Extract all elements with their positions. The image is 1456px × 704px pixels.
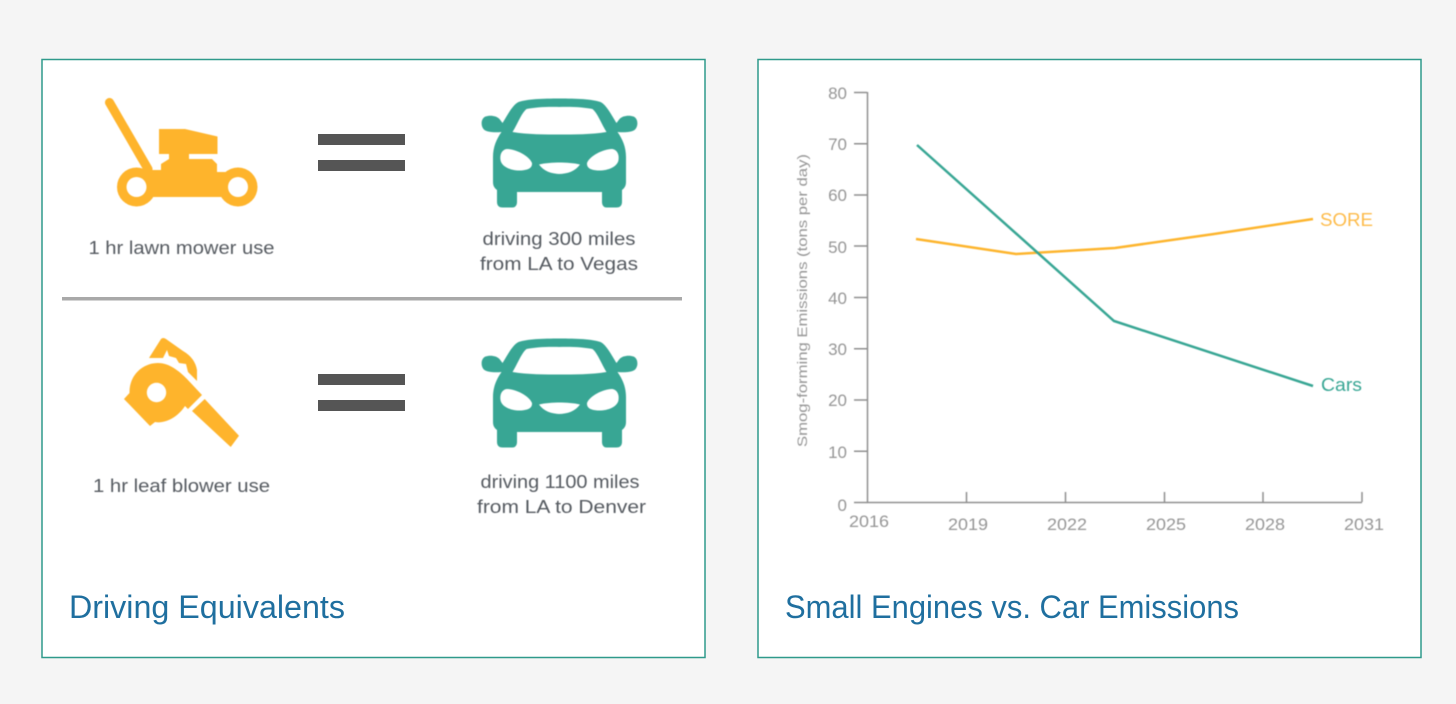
x-axis labels	[849, 512, 1384, 534]
heading: small engines vs car emissions: Small Engines vs. Car Emissions	[785, 589, 1239, 625]
x-axis labels: 2031	[1344, 515, 1384, 534]
icon: equals sign, row two	[318, 374, 405, 411]
line: SORE	[916, 219, 1313, 254]
y-axis labels	[828, 84, 847, 515]
x-axis labels: 2025	[1146, 515, 1186, 534]
icon: car, row one	[482, 98, 637, 208]
y-axis labels: 10	[828, 443, 847, 462]
caption: lawn mower: 1 hr lawn mower use	[88, 238, 274, 258]
y-axis labels: 20	[828, 391, 847, 410]
panel: driving equivalents	[42, 60, 705, 658]
label: SORE: SORE	[1320, 210, 1373, 230]
y-axis labels: 40	[828, 289, 847, 308]
caption: driving to Vegas	[480, 229, 638, 274]
icon: lawn mower	[110, 102, 258, 206]
panel: emissions chart	[758, 60, 1421, 658]
axes	[854, 92, 1362, 502]
caption: driving to Denver	[477, 472, 646, 517]
y-axis labels: 70	[828, 135, 847, 154]
icon: equals sign, row one	[318, 134, 405, 171]
icon: leaf blower	[124, 338, 239, 447]
label: cars: Cars	[1321, 375, 1362, 395]
caption: driving to Vegas: driving 300 miles	[482, 229, 636, 249]
x-axis labels: 2016	[849, 512, 889, 531]
line: cars	[917, 145, 1313, 386]
caption: driving to Denver: from LA to Denver	[477, 497, 646, 517]
caption: driving to Denver: driving 1100 miles	[480, 472, 640, 492]
x-axis labels: 2028	[1245, 515, 1285, 534]
y-axis labels: 50	[828, 238, 847, 257]
y-axis labels: 80	[828, 84, 847, 103]
caption: driving to Vegas: from LA to Vegas	[480, 254, 638, 274]
heading: driving equivalents: Driving Equivalents	[69, 589, 345, 625]
y-axis labels: 0	[838, 496, 847, 515]
x-axis labels: 2019	[948, 515, 988, 534]
x-axis labels: 2022	[1047, 515, 1087, 534]
caption: leaf blower: 1 hr leaf blower use	[93, 476, 270, 496]
y-axis labels: 30	[828, 340, 847, 359]
icon: car, row two	[482, 338, 637, 448]
y-axis labels: 60	[828, 186, 847, 205]
line chart	[794, 84, 1384, 534]
y-axis title: Smog-forming Emissions (tons per day)	[794, 154, 810, 447]
